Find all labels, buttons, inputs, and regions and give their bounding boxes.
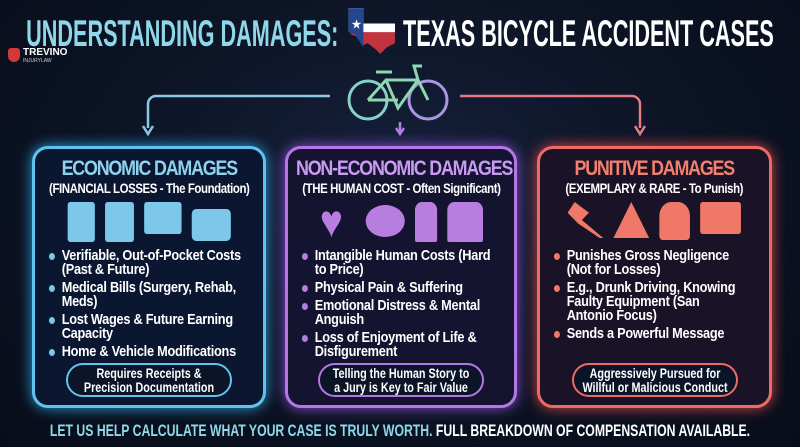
bullets: Loss of Enjoyment of Life & Disfigurement <box>315 329 476 360</box>
logo <box>8 47 67 64</box>
callout: a Jury is Key to Fair Value <box>334 380 468 395</box>
bullets: Emotional Distress & Mental Anguish <box>315 297 480 328</box>
bullets <box>554 247 735 342</box>
panel: non-economic: (THE HUMAN COST - Often Significant) <box>302 181 501 196</box>
panel: non-economic <box>285 146 517 408</box>
icons <box>568 202 741 240</box>
bullets: Intangible Human Costs (Hard to Price) <box>315 247 490 278</box>
bullets: Physical Pain & Suffering <box>315 279 463 296</box>
panel: punitive: (EXEMPLARY & RARE - To Punish) <box>565 181 743 196</box>
panel: punitive <box>537 146 772 408</box>
icons: ♥ <box>320 195 343 247</box>
footer: LET US HELP CALCULATE WHAT YOUR CASE IS TRULY WORTH. FULL BREAKDOWN OF COMPENSATION AVAILABLE. <box>50 421 750 440</box>
logo: INJURYLAW <box>23 58 52 64</box>
bullets <box>302 247 490 360</box>
bullets: Sends a Powerful Message <box>567 325 724 342</box>
heading: NON-ECONOMIC DAMAGES <box>296 157 512 180</box>
icon: bicycle with arrows <box>142 64 646 136</box>
icons <box>320 195 483 247</box>
callout <box>572 363 738 397</box>
callout <box>66 363 232 397</box>
heading: PUNITIVE DAMAGES <box>575 157 734 180</box>
title: UNDERSTANDING DAMAGES: TEXAS BICYCLE ACCIDENT CASES <box>26 13 774 54</box>
callout: Aggressively Pursued for <box>589 366 720 381</box>
callout: Precision Documentation <box>84 380 214 395</box>
callout: Telling the Human Story to <box>333 366 469 381</box>
bullets: Verifiable, Out-of-Pocket Costs (Past & Future) <box>62 247 241 278</box>
callout: Requires Receipts & <box>96 366 202 381</box>
title: ★ <box>352 19 362 31</box>
callout: Willful or Malicious Conduct <box>582 380 727 395</box>
bullets <box>49 247 241 360</box>
panel: economic <box>32 146 266 408</box>
bullets: Home & Vehicle Modifications <box>62 343 236 360</box>
bullets: Medical Bills (Surgery, Rehab, Meds) <box>62 279 236 310</box>
logo: TREVINO <box>23 47 67 58</box>
callout <box>318 363 484 397</box>
bullets: Punishes Gross Negligence (Not for Losses) <box>567 247 729 278</box>
icons <box>68 202 231 242</box>
panel: economic: (FINANCIAL LOSSES - The Foundation) <box>49 181 249 196</box>
heading: ECONOMIC DAMAGES <box>62 157 237 180</box>
bullets: Lost Wages & Future Earning Capacity <box>62 311 233 342</box>
bullets: E.g., Drunk Driving, Knowing Faulty Equipment (San Antonio Focus) <box>567 279 735 324</box>
